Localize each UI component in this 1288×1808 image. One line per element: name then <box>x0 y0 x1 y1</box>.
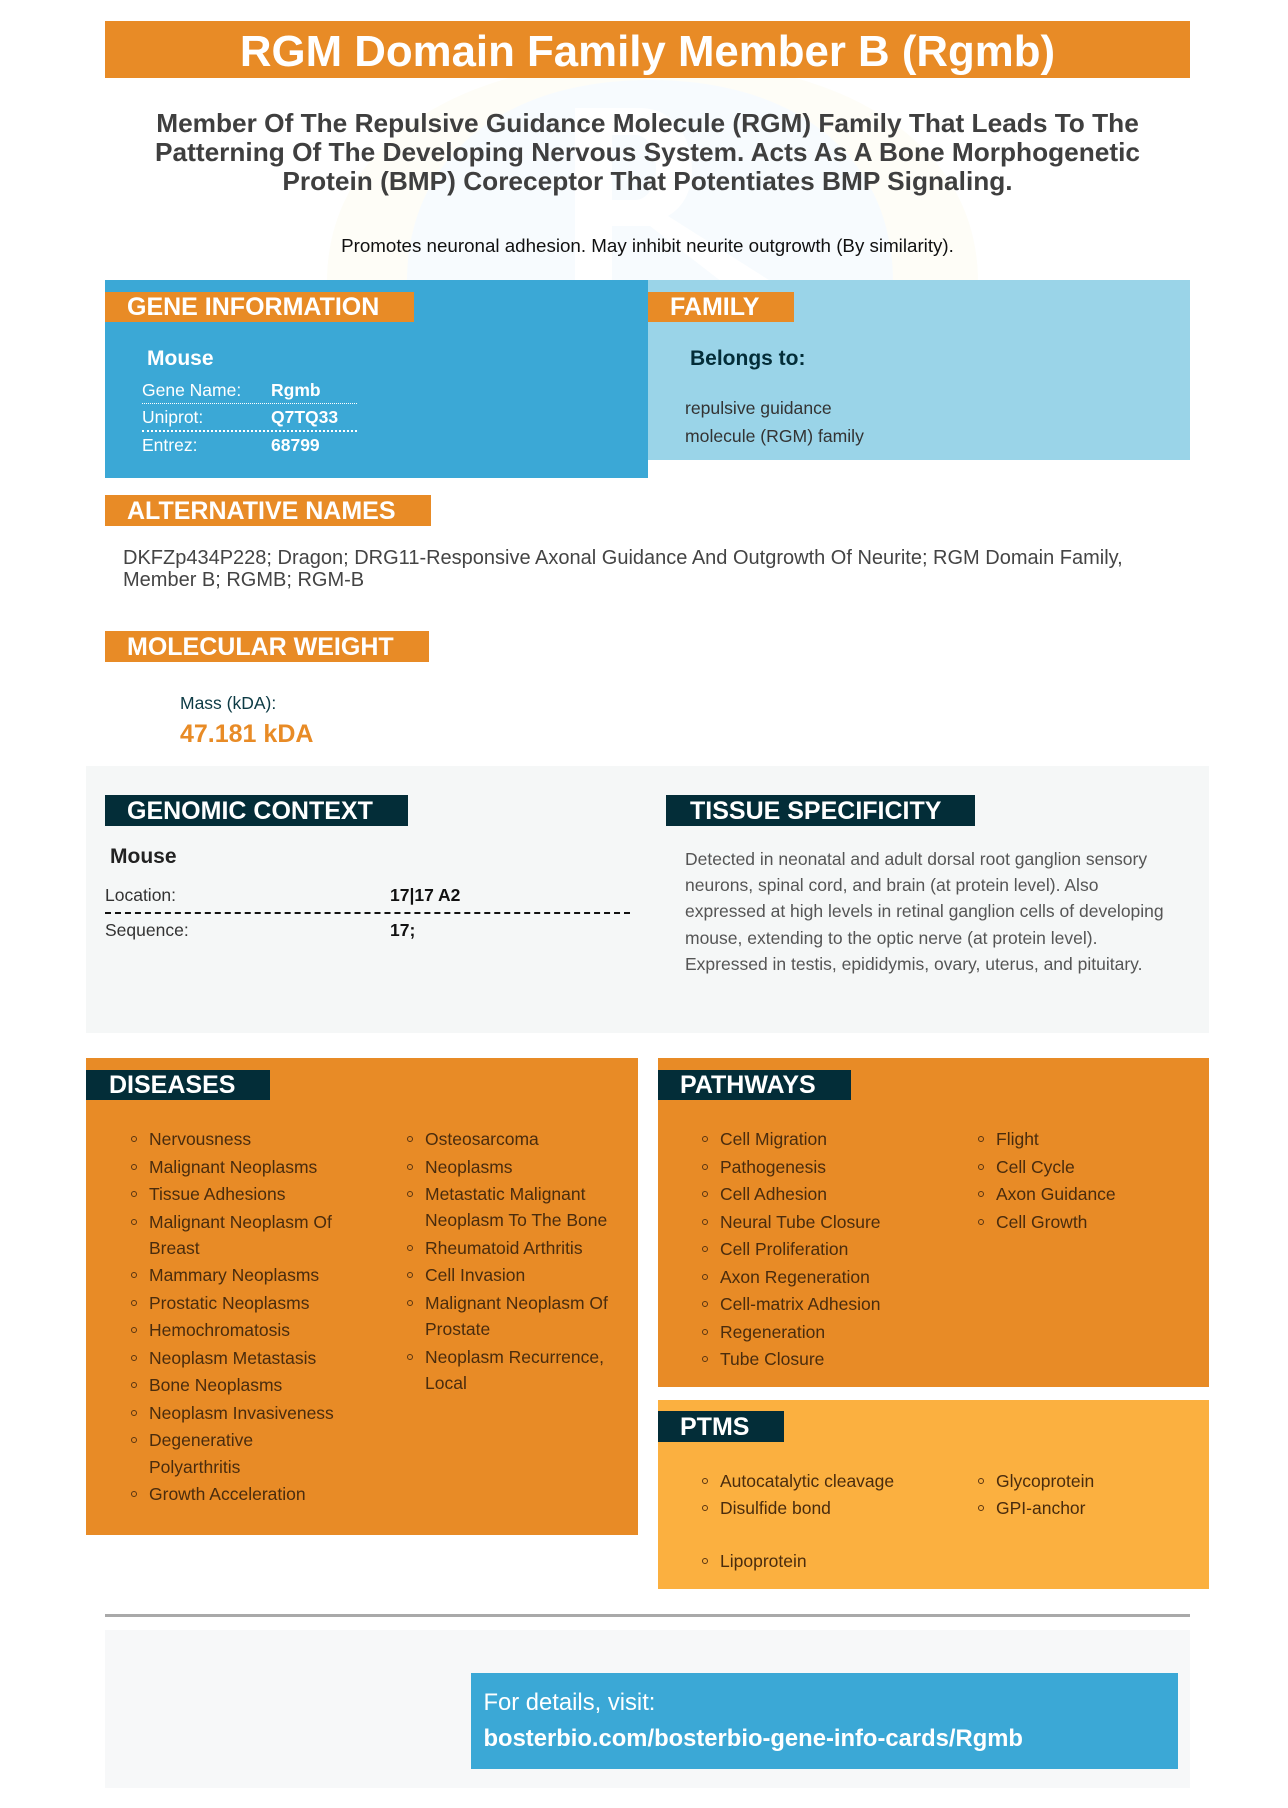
gene info table <box>142 380 357 455</box>
heading: diseases: DISEASES <box>109 1071 235 1099</box>
PTMs list column 1: Disulfide bond <box>720 1498 831 1518</box>
title banner: RGM Domain Family Member B (Rgmb) <box>240 27 1055 76</box>
pathways list column 1: Cell Proliferation <box>720 1239 848 1259</box>
heading: molecular weight: MOLECULAR WEIGHT <box>127 633 394 661</box>
tissue specificity text: mouse, extending to the optic nerve (at protein level). <box>685 928 1097 948</box>
genomic table: Sequence: <box>105 920 189 940</box>
callout: details link <box>471 1673 1178 1769</box>
title banner <box>105 21 1190 78</box>
diseases list column 1: Nervousness <box>149 1129 251 1149</box>
subtitle description: Protein (BMP) Coreceptor That Potentiates BMP Signaling. <box>282 166 1013 196</box>
diseases list column 2: Neoplasm To The Bone <box>425 1210 607 1230</box>
heading: alternative names: ALTERNATIVE NAMES <box>127 497 396 525</box>
diseases list column 1: Neoplasm Metastasis <box>149 1348 316 1368</box>
link text: bosterbio.com/bosterbio-gene-info-cards/Rgmb <box>484 1725 1023 1752</box>
background watermark logo <box>0 0 1288 300</box>
genomic table: 17; <box>390 920 415 940</box>
panel: pathways <box>658 1058 1209 1387</box>
family text: molecule (RGM) family <box>685 426 864 446</box>
PTMs list column 1 <box>702 1471 894 1571</box>
family text: repulsive guidance <box>685 398 832 418</box>
PTMs list column 2: GPI-anchor <box>996 1498 1085 1518</box>
heading: tissue specificity: TISSUE SPECIFICITY <box>690 797 941 825</box>
diseases list column 1: Growth Acceleration <box>149 1484 306 1504</box>
diseases list column 2: Neoplasms <box>425 1157 513 1177</box>
diseases list column 1: Hemochromatosis <box>149 1320 290 1340</box>
alternative names text: DKFZp434P228; Dragon; DRG11-Responsive Axonal Guidance And Outgrowth Of Neurite; RGM Domain Family, <box>123 547 1123 569</box>
alternative names text: Member B; RGMB; RGM-B <box>123 569 364 591</box>
PTMs list column 1: Autocatalytic cleavage <box>720 1471 894 1491</box>
tissue specificity text <box>685 849 1164 974</box>
heading: gene information: GENE INFORMATION <box>127 293 379 321</box>
subtitle description: Member Of The Repulsive Guidance Molecule (RGM) Family That Leads To The <box>156 108 1139 138</box>
diseases list column 1: Neoplasm Invasiveness <box>149 1403 334 1423</box>
heading: PTMs <box>658 1411 784 1442</box>
molecular mass <box>180 693 313 748</box>
pathways list column 2 <box>978 1129 1116 1232</box>
subtitle description: Patterning Of The Developing Nervous System. Acts As A Bone Morphogenetic <box>155 137 1140 167</box>
PTMs list column 1: Lipoprotein <box>720 1551 807 1571</box>
heading: genomic context: GENOMIC CONTEXT <box>127 797 373 825</box>
pathways list column 2: Cell Cycle <box>996 1157 1075 1177</box>
tissue specificity text: neurons, spinal cord, and brain (at protein level). Also <box>685 875 1098 895</box>
heading: PTMs: PTMS <box>680 1413 749 1441</box>
diseases list column 1: Mammary Neoplasms <box>149 1265 319 1285</box>
panel: footer <box>105 1630 1190 1788</box>
gene info table: Entrez: <box>142 435 197 455</box>
pathways list column 2: Flight <box>996 1129 1039 1149</box>
gene info table: Q7TQ33 <box>271 407 338 427</box>
heading: pathways <box>658 1070 851 1100</box>
diseases list column 2: Local <box>425 1373 467 1393</box>
belongs to label: Belongs to: <box>690 347 806 370</box>
heading: pathways: PATHWAYS <box>680 1071 816 1099</box>
panel: gene information <box>105 280 648 478</box>
heading: diseases <box>86 1070 270 1100</box>
diseases list column 1: Prostatic Neoplasms <box>149 1293 309 1313</box>
diseases list column 2 <box>407 1129 608 1393</box>
pathways list column 1: Neural Tube Closure <box>720 1212 880 1232</box>
diseases list column 2: Malignant Neoplasm Of <box>425 1293 608 1313</box>
pathways list column 1: Cell Migration <box>720 1129 827 1149</box>
genomic table <box>105 885 630 940</box>
genomic table: 17|17 A2 <box>390 885 460 905</box>
gene info table: Gene Name: <box>142 380 241 400</box>
diseases list column 1: Tissue Adhesions <box>149 1184 286 1204</box>
diseases list column 1: Breast <box>149 1238 200 1258</box>
diseases list column 1: Degenerative <box>149 1430 253 1450</box>
pathways list column 2: Axon Guidance <box>996 1184 1116 1204</box>
function summary: Promotes neuronal adhesion. May inhibit neurite outgrowth (By similarity). <box>341 235 954 256</box>
visit label: For details, visit: <box>484 1689 655 1716</box>
species label: Mouse <box>147 347 214 370</box>
genomic table: Location: <box>105 885 176 905</box>
panel: diseases <box>86 1058 638 1535</box>
panel: family <box>648 280 1190 460</box>
panel: genomic context and tissue specificity <box>86 766 1209 1033</box>
heading: family: FAMILY <box>670 293 759 321</box>
diseases list column 2: Cell Invasion <box>425 1265 525 1285</box>
diseases list column 1 <box>131 1129 334 1504</box>
diseases list column 2: Osteosarcoma <box>425 1129 539 1149</box>
pathways list column 2: Cell Growth <box>996 1212 1087 1232</box>
mass value: 47.181 kDA <box>180 720 313 748</box>
panel: PTMs <box>658 1400 1209 1589</box>
pathways list column 1: Cell-matrix Adhesion <box>720 1294 880 1314</box>
PTMs list column 2 <box>978 1471 1094 1518</box>
gene info table: Uniprot: <box>142 407 203 427</box>
tissue specificity text: Detected in neonatal and adult dorsal root ganglion sensory <box>685 849 1147 869</box>
gene info table: 68799 <box>271 435 320 455</box>
tissue specificity text: Expressed in testis, epididymis, ovary, uterus, and pituitary. <box>685 954 1142 974</box>
subtitle description <box>155 108 1140 196</box>
tissue specificity text: expressed at high levels in retinal ganglion cells of developing <box>685 901 1164 921</box>
alternative names text <box>123 547 1123 591</box>
heading: family <box>648 292 794 322</box>
pathways list column 1: Axon Regeneration <box>720 1267 870 1287</box>
diseases list column 1: Bone Neoplasms <box>149 1375 282 1395</box>
mass label: Mass (kDA): <box>180 693 276 713</box>
diseases list column 1: Polyarthritis <box>149 1457 240 1477</box>
pathways list column 1: Regeneration <box>720 1322 825 1342</box>
family text <box>685 398 864 446</box>
diseases list column 1: Malignant Neoplasm Of <box>149 1212 332 1232</box>
gene info table: Rgmb <box>271 380 321 400</box>
species label: Mouse <box>110 845 177 868</box>
pathways list column 1 <box>702 1129 880 1369</box>
diseases list column 2: Rheumatoid Arthritis <box>425 1238 583 1258</box>
pathways list column 1: Cell Adhesion <box>720 1184 827 1204</box>
diseases list column 2: Neoplasm Recurrence, <box>425 1347 604 1367</box>
pathways list column 1: Pathogenesis <box>720 1157 826 1177</box>
PTMs list column 2: Glycoprotein <box>996 1471 1094 1491</box>
diseases list column 2: Metastatic Malignant <box>425 1184 586 1204</box>
diseases list column 2: Prostate <box>425 1319 490 1339</box>
diseases list column 1: Malignant Neoplasms <box>149 1157 317 1177</box>
pathways list column 1: Tube Closure <box>720 1349 824 1369</box>
